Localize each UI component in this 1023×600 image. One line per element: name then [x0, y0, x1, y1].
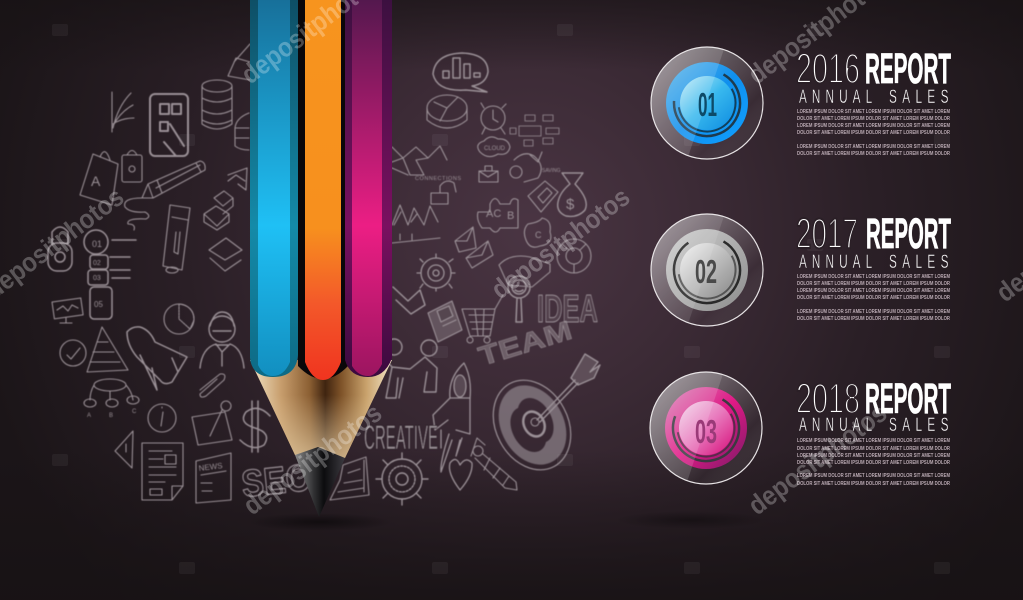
icon: businessman — [200, 312, 244, 368]
icon: puzzle pieces — [478, 198, 518, 232]
icon: puzzle pieces: B — [507, 210, 514, 222]
icon: open padlock — [431, 181, 456, 204]
icon: server box — [228, 44, 250, 80]
icon: org chart: C — [132, 409, 137, 415]
body copy: LOREM IPSUM DOLOR SIT AMET LOREM IPSUM DOLOR SIT AMET LOREM — [797, 288, 950, 294]
subheading annual sales: ANNUAL — [799, 415, 872, 436]
heading 2017 report — [796, 210, 951, 258]
body copy: LOREM IPSUM DOLOR SIT AMET LOREM IPSUM DOLOR SIT AMET LOREM — [797, 438, 950, 444]
icon: envelopes — [455, 227, 493, 268]
icon: rocket plane — [127, 327, 187, 390]
doodles: right half: CREATIVE — [364, 419, 438, 457]
icon: flow boxes — [510, 115, 559, 146]
subheading annual sales: SALES — [889, 415, 949, 436]
blue stripe — [250, 0, 298, 377]
body copy: LOREM IPSUM DOLOR SIT AMET LOREM IPSUM DOLOR SIT AMET LOREM — [797, 144, 950, 150]
number 03: 03 — [695, 413, 717, 450]
icon: cloud — [478, 137, 510, 157]
icon: arrow into target — [537, 354, 600, 422]
icon: heart — [449, 459, 472, 490]
icon: hand arrow — [393, 287, 425, 314]
depositphotos watermarks: depositphotos — [486, 182, 635, 305]
pencil graphite lead — [295, 447, 345, 517]
icon: large gear — [376, 453, 428, 505]
icon: connections network: CONNECTIONS — [415, 176, 461, 182]
text: SEO doodle: SEO — [240, 457, 314, 506]
body copy: DOLOR SIT AMET LOREM IPSUM DOLOR SIT AMET LOREM IPSUM DOLOR — [797, 295, 951, 301]
pencil wood tip — [250, 360, 392, 458]
body copy — [797, 274, 951, 322]
icon: document — [142, 443, 183, 500]
body copy: DOLOR SIT AMET LOREM IPSUM DOLOR SIT AMET LOREM IPSUM DOLOR — [797, 151, 951, 157]
icon: info circle — [148, 404, 176, 432]
report 2018 block — [640, 365, 951, 487]
icon: 3D pie — [427, 95, 467, 128]
subheading annual sales: ANNUAL — [799, 252, 872, 273]
number 02: 02 — [695, 253, 717, 290]
icon: numbered tower: 02 — [93, 260, 101, 267]
text: TEAM: TEAM — [475, 315, 576, 372]
icon: pie chart — [164, 304, 194, 334]
icon: org chart: B — [109, 413, 113, 419]
icon: magnifier smile — [508, 276, 530, 322]
icon: money bag: $ — [566, 196, 575, 213]
icon: numbered tower: 03 — [93, 275, 101, 282]
icon: connections network — [392, 146, 461, 182]
icon: striped tie — [471, 438, 517, 490]
report 2017 block — [640, 207, 951, 327]
subheading annual sales: SALES — [889, 87, 949, 108]
heading 2016 report — [796, 45, 951, 93]
icon: money bag — [558, 173, 586, 216]
heading 2016 report: 2016 — [796, 45, 860, 93]
icon: triangle tag — [115, 431, 133, 468]
icon: padlock — [48, 227, 72, 271]
purple stripe — [345, 0, 392, 377]
heading 2018 report: 2018 — [796, 375, 860, 423]
subheading annual sales — [799, 87, 949, 108]
icon: money bill — [528, 181, 558, 212]
body copy: LOREM IPSUM DOLOR SIT AMET LOREM IPSUM DOLOR SIT AMET LOREM — [797, 309, 950, 315]
icon: tablet with hand — [150, 94, 188, 156]
doodles: right half — [330, 53, 600, 505]
report 2016 block — [640, 40, 951, 160]
icon: shopping bag: A — [91, 173, 101, 189]
icon: wheel — [557, 239, 591, 273]
icon: cloud: CLOUD — [484, 146, 506, 152]
black separators — [298, 0, 348, 379]
body copy: LOREM IPSUM DOLOR SIT AMET LOREM IPSUM DOLOR SIT AMET LOREM — [797, 453, 950, 459]
icon: pinned note — [192, 401, 232, 445]
icon: rocket — [433, 363, 470, 472]
icon: gear — [417, 254, 455, 291]
icon: pencil doodle — [142, 161, 205, 198]
body copy: DOLOR SIT AMET LOREM IPSUM DOLOR SIT AMET LOREM IPSUM DOLOR — [797, 481, 951, 487]
body copy: DOLOR SIT AMET LOREM IPSUM DOLOR SIT AMET LOREM IPSUM DOLOR — [797, 281, 951, 287]
icon: piggy figure: SAVING — [542, 168, 561, 174]
icon: org chart — [84, 379, 139, 419]
icon: floppy disk — [428, 301, 462, 342]
text: IDEA: IDEA — [537, 288, 598, 331]
body copy — [797, 109, 951, 157]
icon: mountain line chart — [392, 205, 440, 243]
icon: stairs and arrow — [204, 168, 247, 230]
orange stripe — [305, 0, 341, 380]
body copy: DOLOR SIT AMET LOREM IPSUM DOLOR SIT AMET LOREM IPSUM DOLOR — [797, 116, 951, 122]
heading 2018 report — [796, 375, 951, 423]
icon: newspaper: NEWS — [198, 461, 223, 473]
icon: squiggle — [125, 198, 149, 230]
icon: pyramid — [87, 327, 128, 372]
icon: fan line chart — [112, 92, 134, 132]
icon: dollar sign — [240, 401, 270, 452]
lens button 01 — [650, 46, 764, 160]
body copy: DOLOR SIT AMET LOREM IPSUM DOLOR SIT AMET LOREM IPSUM DOLOR — [797, 446, 951, 452]
body copy: LOREM IPSUM DOLOR SIT AMET LOREM IPSUM DOLOR SIT AMET LOREM — [797, 109, 950, 115]
subheading annual sales: SALES — [889, 252, 949, 273]
subheading annual sales — [799, 415, 949, 436]
depositphotos watermarks: depositphotos — [743, 398, 892, 521]
lens button 03 — [649, 371, 763, 485]
icon: briefcase — [479, 166, 498, 182]
heading 2017 report: 2017 — [796, 210, 858, 258]
icon: alarm clock — [481, 103, 506, 134]
icon: spiral notepad — [330, 457, 369, 500]
body copy: DOLOR SIT AMET LOREM IPSUM DOLOR SIT AMET LOREM IPSUM DOLOR — [797, 130, 951, 136]
subheading annual sales — [799, 252, 949, 273]
body copy: DOLOR SIT AMET LOREM IPSUM DOLOR SIT AMET LOREM IPSUM DOLOR — [797, 316, 951, 322]
icon: puzzle pieces: AC — [486, 208, 501, 220]
body copy: LOREM IPSUM DOLOR SIT AMET LOREM IPSUM DOLOR SIT AMET LOREM — [797, 473, 950, 479]
icon: database cylinder — [202, 80, 232, 129]
icon: piggy figure — [510, 152, 561, 182]
number 01: 01 — [698, 86, 717, 123]
shadows under the pencil and third lens — [248, 511, 765, 531]
icon: shaking hands people — [386, 339, 437, 398]
body copy — [797, 438, 951, 487]
icon: piggy bank — [499, 256, 550, 287]
icon: clipboard — [122, 150, 142, 182]
icon: shopping cart — [462, 295, 503, 343]
icon: newspaper — [196, 453, 231, 503]
depositphotos watermarks: depositphotos — [238, 398, 387, 521]
icon: speech bubble with coins — [433, 53, 488, 92]
pencil — [250, 0, 392, 517]
icon: numbered tower: 01 — [92, 239, 102, 249]
icon: shopping bag — [80, 152, 118, 205]
icon: numbered tower — [84, 230, 136, 319]
lens button 02 — [650, 213, 764, 327]
icon: paperclip — [200, 374, 225, 397]
icon: numbered tower: 05 — [94, 300, 103, 309]
icon: target — [478, 367, 586, 483]
icon: layers — [209, 238, 242, 271]
icon: check circle — [60, 340, 86, 366]
icon: monitor chart — [52, 298, 83, 323]
body copy: LOREM IPSUM DOLOR SIT AMET LOREM IPSUM DOLOR SIT AMET LOREM — [797, 123, 950, 129]
icon: puzzle C: C — [535, 230, 542, 240]
subheading annual sales: ANNUAL — [799, 87, 872, 108]
icon: puzzle C — [524, 218, 551, 247]
icon: USB drive — [163, 205, 190, 273]
icon: org chart: A — [87, 413, 91, 419]
body copy: LOREM IPSUM DOLOR SIT AMET LOREM IPSUM DOLOR SIT AMET LOREM — [797, 274, 950, 280]
doodles: left half — [48, 44, 314, 506]
icon: book stack — [235, 113, 249, 150]
body copy: DOLOR SIT AMET LOREM IPSUM DOLOR SIT AMET LOREM IPSUM DOLOR — [797, 460, 951, 466]
